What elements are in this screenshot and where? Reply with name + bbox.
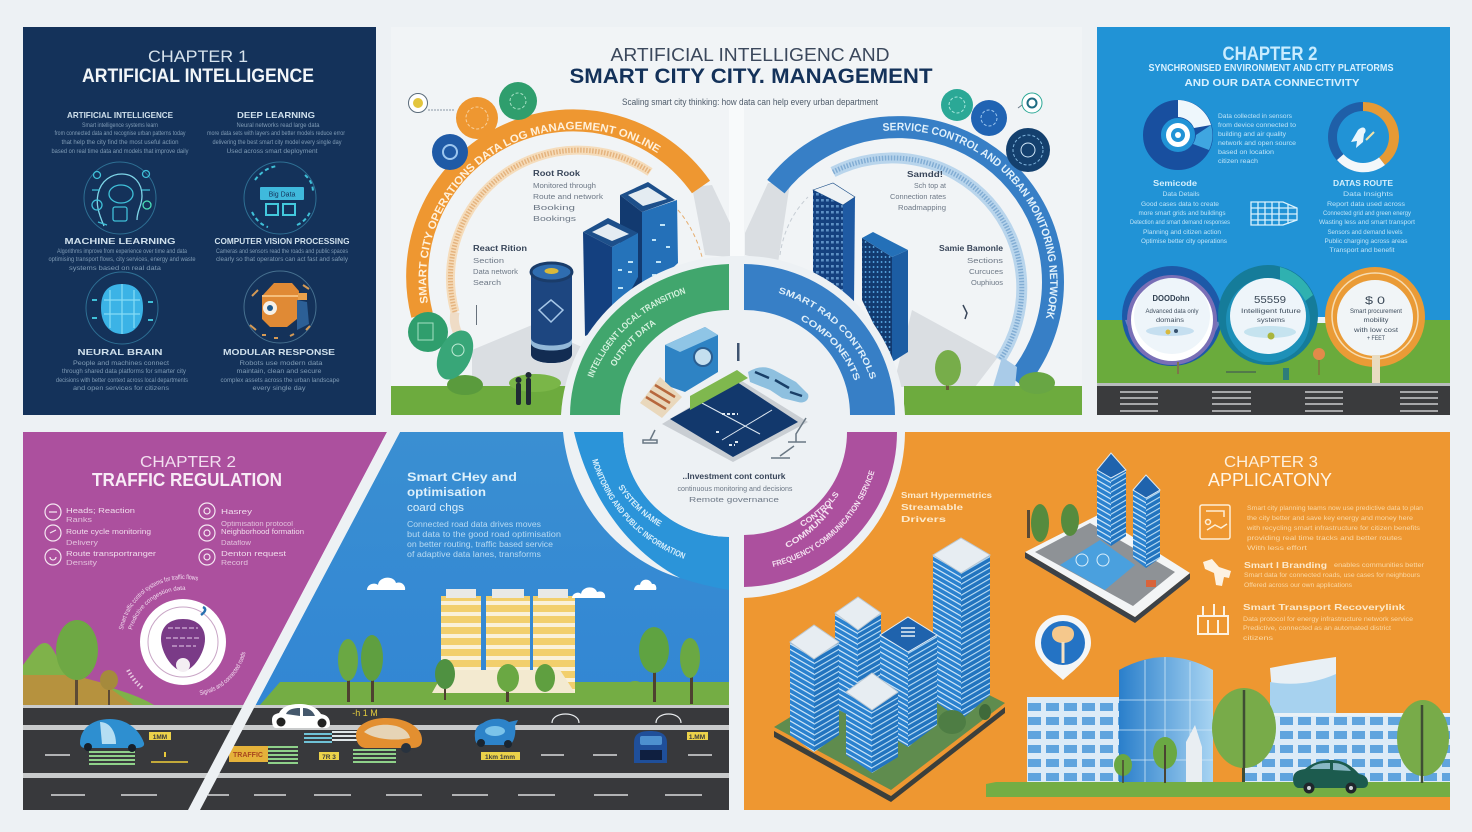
arc: green segment [570,264,729,415]
arc: blue segment [744,264,895,415]
text block: left column: Data Details [1162,191,1200,198]
text block: centre note: continuous monitoring and decisions [678,486,793,493]
text block: left column: Semicode [1153,179,1198,188]
list: application one: providing real time tracks and better routes [1247,535,1403,542]
text block: deep learning [207,110,346,155]
text block: smart city optimisation [407,470,561,559]
car: blue roadster [475,719,518,748]
text block: react rition: Search [473,280,501,287]
trees [1114,688,1449,783]
small tool icons [643,418,806,458]
list: traffic icons and labels left: Density [66,560,98,567]
heading: chapter 2: CHAPTER 2 [1222,44,1318,65]
heading: chapter 2: SYNCHRONISED ENVIRONMENT AND CITY PLATFORMS [1148,62,1394,74]
icons: right service bubbles [941,89,1050,172]
list: traffic icons and labels left: Route transportranger [66,551,157,558]
text block: computer vision: COMPUTER VISION PROCESSING [214,236,350,246]
text block: right column [1319,179,1415,254]
text block: centre note: ..Investment cont conturk [682,472,786,481]
text block: react rition [473,244,527,287]
tower: blue roof [880,617,937,747]
road markings and labels: -h 1 M [352,708,378,718]
text block: machine learning: optimising transport flows, city services, energy and waste [48,256,196,263]
list: traffic icons and labels right: Record [221,560,248,567]
list: application one: with recycling smart infrastructure for citizen benefits [1246,525,1421,532]
list: application three: citizens [1243,635,1274,642]
text block: deep learning: Used across smart deployment [226,148,318,155]
text block: left column [1130,179,1231,245]
icon: orange robot [244,271,316,343]
text block: root rook: Bookings [533,216,577,223]
list: application two: Offered across our own applications [1244,582,1353,589]
circle: third stat: Smart procurement [1350,308,1402,315]
chart: traffic target ring: Signals and connected roads [200,652,246,696]
title: Scaling smart city thinking: how data can help every urban department [622,97,878,107]
text block: samie bamonle: Curcuces [969,269,1004,276]
road markings and labels: 1km 1mm [485,754,515,761]
arc: green segment: OUTPUT DATA [610,320,656,366]
text block: smart applications [901,490,992,524]
chart: traffic target ring: Smart traffic control systems for traffic flows [118,574,198,630]
circle: first stat: DOODohn [1152,293,1190,303]
glass buildings [1027,657,1450,794]
text block: machine learning: systems based on real data [69,265,161,272]
text block: donut note: building and air quality [1218,131,1287,138]
text block: samdd: Connection rates [890,194,947,201]
text block: left column: Good cases data to create [1141,201,1219,208]
list: traffic icons and labels right: Denton request [221,551,286,558]
icon: brain circuit [84,162,156,234]
text block: smart city optimisation: optimisation [407,485,486,499]
text block: smart city optimisation: coard chgs [407,502,465,514]
tower: left [790,625,839,752]
text block: donut note: citizen reach [1218,158,1258,165]
chart: traffic target ring: Predictive congestion data [128,586,186,630]
heading: application: CHAPTER 3 [1224,454,1318,471]
car: white [272,704,330,728]
list: traffic icons and labels right [199,503,304,567]
text block: computer vision [214,236,350,263]
list: traffic icons and labels right: Neighborhood formation [221,529,304,536]
text block: react rition: React Rition [473,244,527,253]
arc: lower left blue swoosh: SYSTEM NAME [618,484,662,526]
icon: neural chip shield [86,272,158,344]
text block: right column: Wasting less and smart transport [1319,219,1415,226]
text block: right column: Transport and benefit [1330,247,1395,254]
circle: second stat: 55559 [1254,295,1286,306]
road with lane marks [1097,386,1450,415]
text block: artificial intelligence: ARTIFICIAL INTELLIGENCE [67,110,173,120]
list: application two: enables communities better [1334,562,1425,569]
arc: green segment: INTELLIGENT LOCAL TRANSITION [588,288,686,378]
clouds [367,578,656,598]
text block: artificial intelligence [52,110,189,155]
text block: robotics: complex assets across the urban landscape [220,377,340,384]
chart: blue donut [1152,100,1212,161]
chart: traffic target ring [118,574,246,696]
ground details [1177,348,1325,380]
text block: neural network: decisions with better context across local departments [56,377,189,384]
list: application one [1200,505,1423,552]
icon: data dashboard [244,162,316,234]
central hub ring [561,256,905,598]
text block: right column: Public charging across areas [1324,238,1408,245]
building: right white block [1245,657,1450,782]
text block: right column: DATAS ROUTE [1333,179,1394,188]
heading: chapter 1: ARTIFICIAL INTELLIGENCE [82,66,314,87]
text block: deep learning: Neural networks read large data [236,122,320,129]
text block: left column: Optimise better city operations [1141,238,1228,245]
text block: react rition: Section [473,258,504,265]
text block: deep learning: more data sets with layers and better models reduce error [207,130,346,137]
arc: purple segment [744,432,897,587]
right plaza and grass [745,183,998,387]
text block: machine learning: MACHINE LEARNING [64,236,176,246]
text block: donut note: Data collected in sensors [1218,113,1293,120]
text block: smart city optimisation: but data to the good road optimisation [407,530,561,539]
hub backdrop [560,256,905,600]
building: glass tower [1119,657,1213,782]
purple hills with trees [23,620,154,707]
text block: artificial intelligence: from connected data and recognise urban patterns today [54,130,186,137]
heading: traffic regulation: TRAFFIC REGULATION [92,470,282,490]
title: SMART CITY CITY. MANAGEMENT [570,65,933,88]
text block: deep learning: delivering the best smart city model every single day [212,139,342,146]
text block: samie bamonle: Sections [967,258,1004,265]
text block: smart applications: Streamable [901,502,963,512]
orange arc with label: SMART CITY OPERATIONS DATA LOG MANAGEMENT ONLINE [418,122,661,304]
text block: samdd: Sch top at [914,183,946,190]
heading: traffic regulation: CHAPTER 2 [140,454,236,471]
isometric tower cluster [774,538,1005,802]
road markings and labels: 7R 3 [322,754,336,761]
text block: root rook [533,169,604,223]
car: orange [356,718,422,753]
text block: root rook: Route and network [533,194,604,201]
arc: purple segment: COMMUNITY [786,504,833,547]
text block: computer vision: clearly so that operators can act fast and safely [216,256,349,263]
list: traffic icons and labels right: Hasrey [221,509,253,516]
text block: deep learning: DEEP LEARNING [237,110,315,120]
tower: block two [1133,475,1160,568]
road markings and labels: 1MM [153,734,167,741]
list: traffic icons and labels left [45,504,157,567]
text block: react rition: Data network [473,269,519,276]
circle: first stat [1122,266,1222,366]
list: application one: the city better and save key energy and money here [1247,515,1413,522]
list: application one: With less effort [1247,545,1307,552]
list: traffic icons and labels left: Heads; Reaction [66,508,135,515]
text block: samie bamonle: Samie Bamonle [939,244,1004,253]
text block: samdd [890,170,947,212]
text block: robotics: MODULAR RESPONSE [223,347,335,357]
text block: donut note: from device connected to [1218,122,1296,129]
text block: robotics: Robots use modern data [240,360,323,367]
car: left blue [80,719,144,752]
text block: centre note: Remote governance [689,497,779,504]
panel: smart city optimisation sky [200,432,729,810]
panel: chapter 1 artificial intelligence [23,27,376,415]
right grass with tree and bush [904,350,1082,415]
building: low left [1027,697,1135,782]
text block: robotics: every single day [252,385,306,392]
cylinder building [531,263,572,363]
white diagonal divider [188,432,400,810]
text block: neural network: NEURAL BRAIN [78,347,162,357]
list: application three: Smart Transport Recoverylink [1243,602,1405,612]
title [570,45,933,107]
icon: location pin [1035,615,1091,680]
text block: robotics: maintain, clean and secure [236,368,322,375]
text block: machine learning [48,236,196,272]
road markings and labels: TRAFFIC [233,752,263,759]
circle: second stat: Intelligent future [1241,308,1301,315]
panel: chapter 3 application [744,432,1450,810]
chart: orange and blue ring [1328,102,1399,172]
text block: samie bamonle: Ouphiuos [971,280,1004,287]
text block: smart city optimisation: Connected road data drives moves [407,520,541,529]
text block: right column: Data Insights [1343,191,1394,198]
text block: computer vision: Cameras and sensors read the roads and public spaces [216,248,349,255]
list: application two [1203,559,1425,589]
text block: neural network: and open services for citizens [73,385,170,392]
road markings and labels [89,708,708,764]
heading: application: APPLICATONY [1208,470,1332,490]
list: traffic icons and labels left: Route cycle monitoring [66,529,151,536]
list: traffic icons and labels right: Optimisation protocol [221,521,293,528]
heading: traffic regulation [92,454,282,490]
road markings and labels: 1.MM [689,734,705,741]
panel: chapter 2 traffic regulation [23,432,729,810]
text block: samdd: Samdd! [907,170,943,179]
text block: neural network [56,347,189,392]
circle: third stat: + FEET [1367,335,1385,342]
road [23,705,729,810]
isometric centre scene [640,327,808,462]
arc: lower left blue swoosh: MONITORING AND PUBLIC INFORMATION [592,458,686,559]
list: application three [1198,602,1413,642]
icons: left service bubbles [408,82,537,385]
text block: neural network: People and machines connect [73,360,169,367]
blue arc with label [767,116,1064,386]
text block: donut note: network and open source [1218,140,1296,147]
text block: smart city optimisation: Smart CHey and [407,470,517,484]
heading: chapter 1: CHAPTER 1 [148,47,248,66]
orange arc with label [406,109,710,334]
text block: artificial intelligence: that help the city find the most useful action [62,139,179,146]
text block: left column: more smart grids and buildings [1138,210,1226,217]
circle: third stat: $ 0 [1365,295,1385,307]
text block: smart city optimisation: on better routing, traffic based service [407,540,554,549]
list: application three: Data protocol for energy infrastructure network service [1243,616,1413,623]
car: dark blue rear [634,731,667,763]
text block: right column: Connected grid and green energy [1323,210,1412,217]
tower: second [835,597,881,720]
heading: chapter 2 [1148,44,1394,89]
text block: left column: Detection and smart demand responses [1130,219,1231,226]
arc: purple segment: CONTROLS [800,492,838,526]
twin towers left [583,182,678,336]
list: traffic icons and labels left: Delivery [66,540,99,547]
grass strip [986,782,1450,797]
building: yellow towers [432,589,575,693]
arc: purple segment: FREQUENCY COMMUNICATION SERVICE [772,470,874,567]
connectors between circles [1210,317,1410,323]
isometric city block [1025,453,1190,623]
text block: left column: Planning and citizen action [1143,229,1221,236]
text block: donut note: based on location [1218,149,1274,156]
text block: smart applications: Smart Hypermetrics [901,490,992,500]
blue arc with label: SERVICE CONTROL AND URBAN MONITORING NETWORK [883,122,1058,320]
heading: chapter 2: AND OUR DATA CONNECTIVITY [1184,77,1360,89]
text block: artificial intelligence: Smart intelligence systems learn [82,122,158,129]
circle: third stat: mobility [1364,317,1389,324]
arc: blue segment: COMPONENTS [802,316,860,380]
text block: donut note [1218,113,1296,165]
text block: samie bamonle [939,244,1004,287]
list: application three: Predictive, connected as an automated district [1243,625,1391,632]
circle: third stat: with low cost [1353,327,1398,334]
list: application two: Smart I Branding [1244,560,1327,570]
text block: smart city optimisation: of adaptive data lanes, transforms [407,550,541,559]
list: application two: Smart data for connected roads, use cases for neighbours [1244,572,1421,579]
title: ARTIFICIAL INTELLIGENC AND [610,45,890,65]
circle: second stat [1218,265,1318,365]
text block: smart applications: Drivers [901,514,946,524]
text block: right column: Report data used across [1327,201,1406,208]
panel: central smart city management [391,45,1082,415]
blue grass and building [260,578,729,705]
text block: neural network: through shared data platforms for smarter city [62,368,187,375]
left plaza and grass [391,185,730,415]
tower: front [846,673,898,773]
text block: artificial intelligence: based on real time data and models that improve daily [52,148,189,155]
text block: root rook: Monitored through [533,183,596,190]
circle: first stat: Advanced data only [1146,308,1199,315]
arc: lower left blue swoosh [563,432,729,590]
trees [338,627,700,704]
text block: root rook: Root Rook [533,169,581,178]
people and lampposts [476,305,967,405]
text block: root rook: Booking [533,205,575,212]
heading: chapter 1 [82,47,314,87]
heading: application [1208,454,1332,490]
list: traffic icons and labels right: Dataflow [221,540,252,547]
text block: right column: Sensors and demand levels [1328,229,1403,236]
twin towers right [813,183,908,362]
text block: machine learning: Algorithms improve from experience over time and data [57,248,187,255]
car: green [1293,760,1368,794]
icon: solar panel grid [1251,202,1297,225]
list: traffic icons and labels left: Ranks [66,517,93,524]
text block: robotics [220,347,340,392]
icon: data dashboard: Big Data [269,192,296,198]
circle: third stat [1325,267,1425,383]
circle: first stat: domains [1156,317,1185,324]
vehicles [80,704,667,763]
tower: tallest [933,538,990,720]
circle: second stat: systems [1257,317,1286,324]
arc: blue segment: SMART RAD CONTROLS [778,288,876,379]
tower: block one [1097,453,1126,546]
list: application one: Smart city planning teams now use predictive data to plan [1247,505,1423,512]
panel: chapter 2 smart environment [1097,27,1450,415]
text block: centre note [678,472,793,504]
text block: samdd: Roadmapping [898,205,946,212]
